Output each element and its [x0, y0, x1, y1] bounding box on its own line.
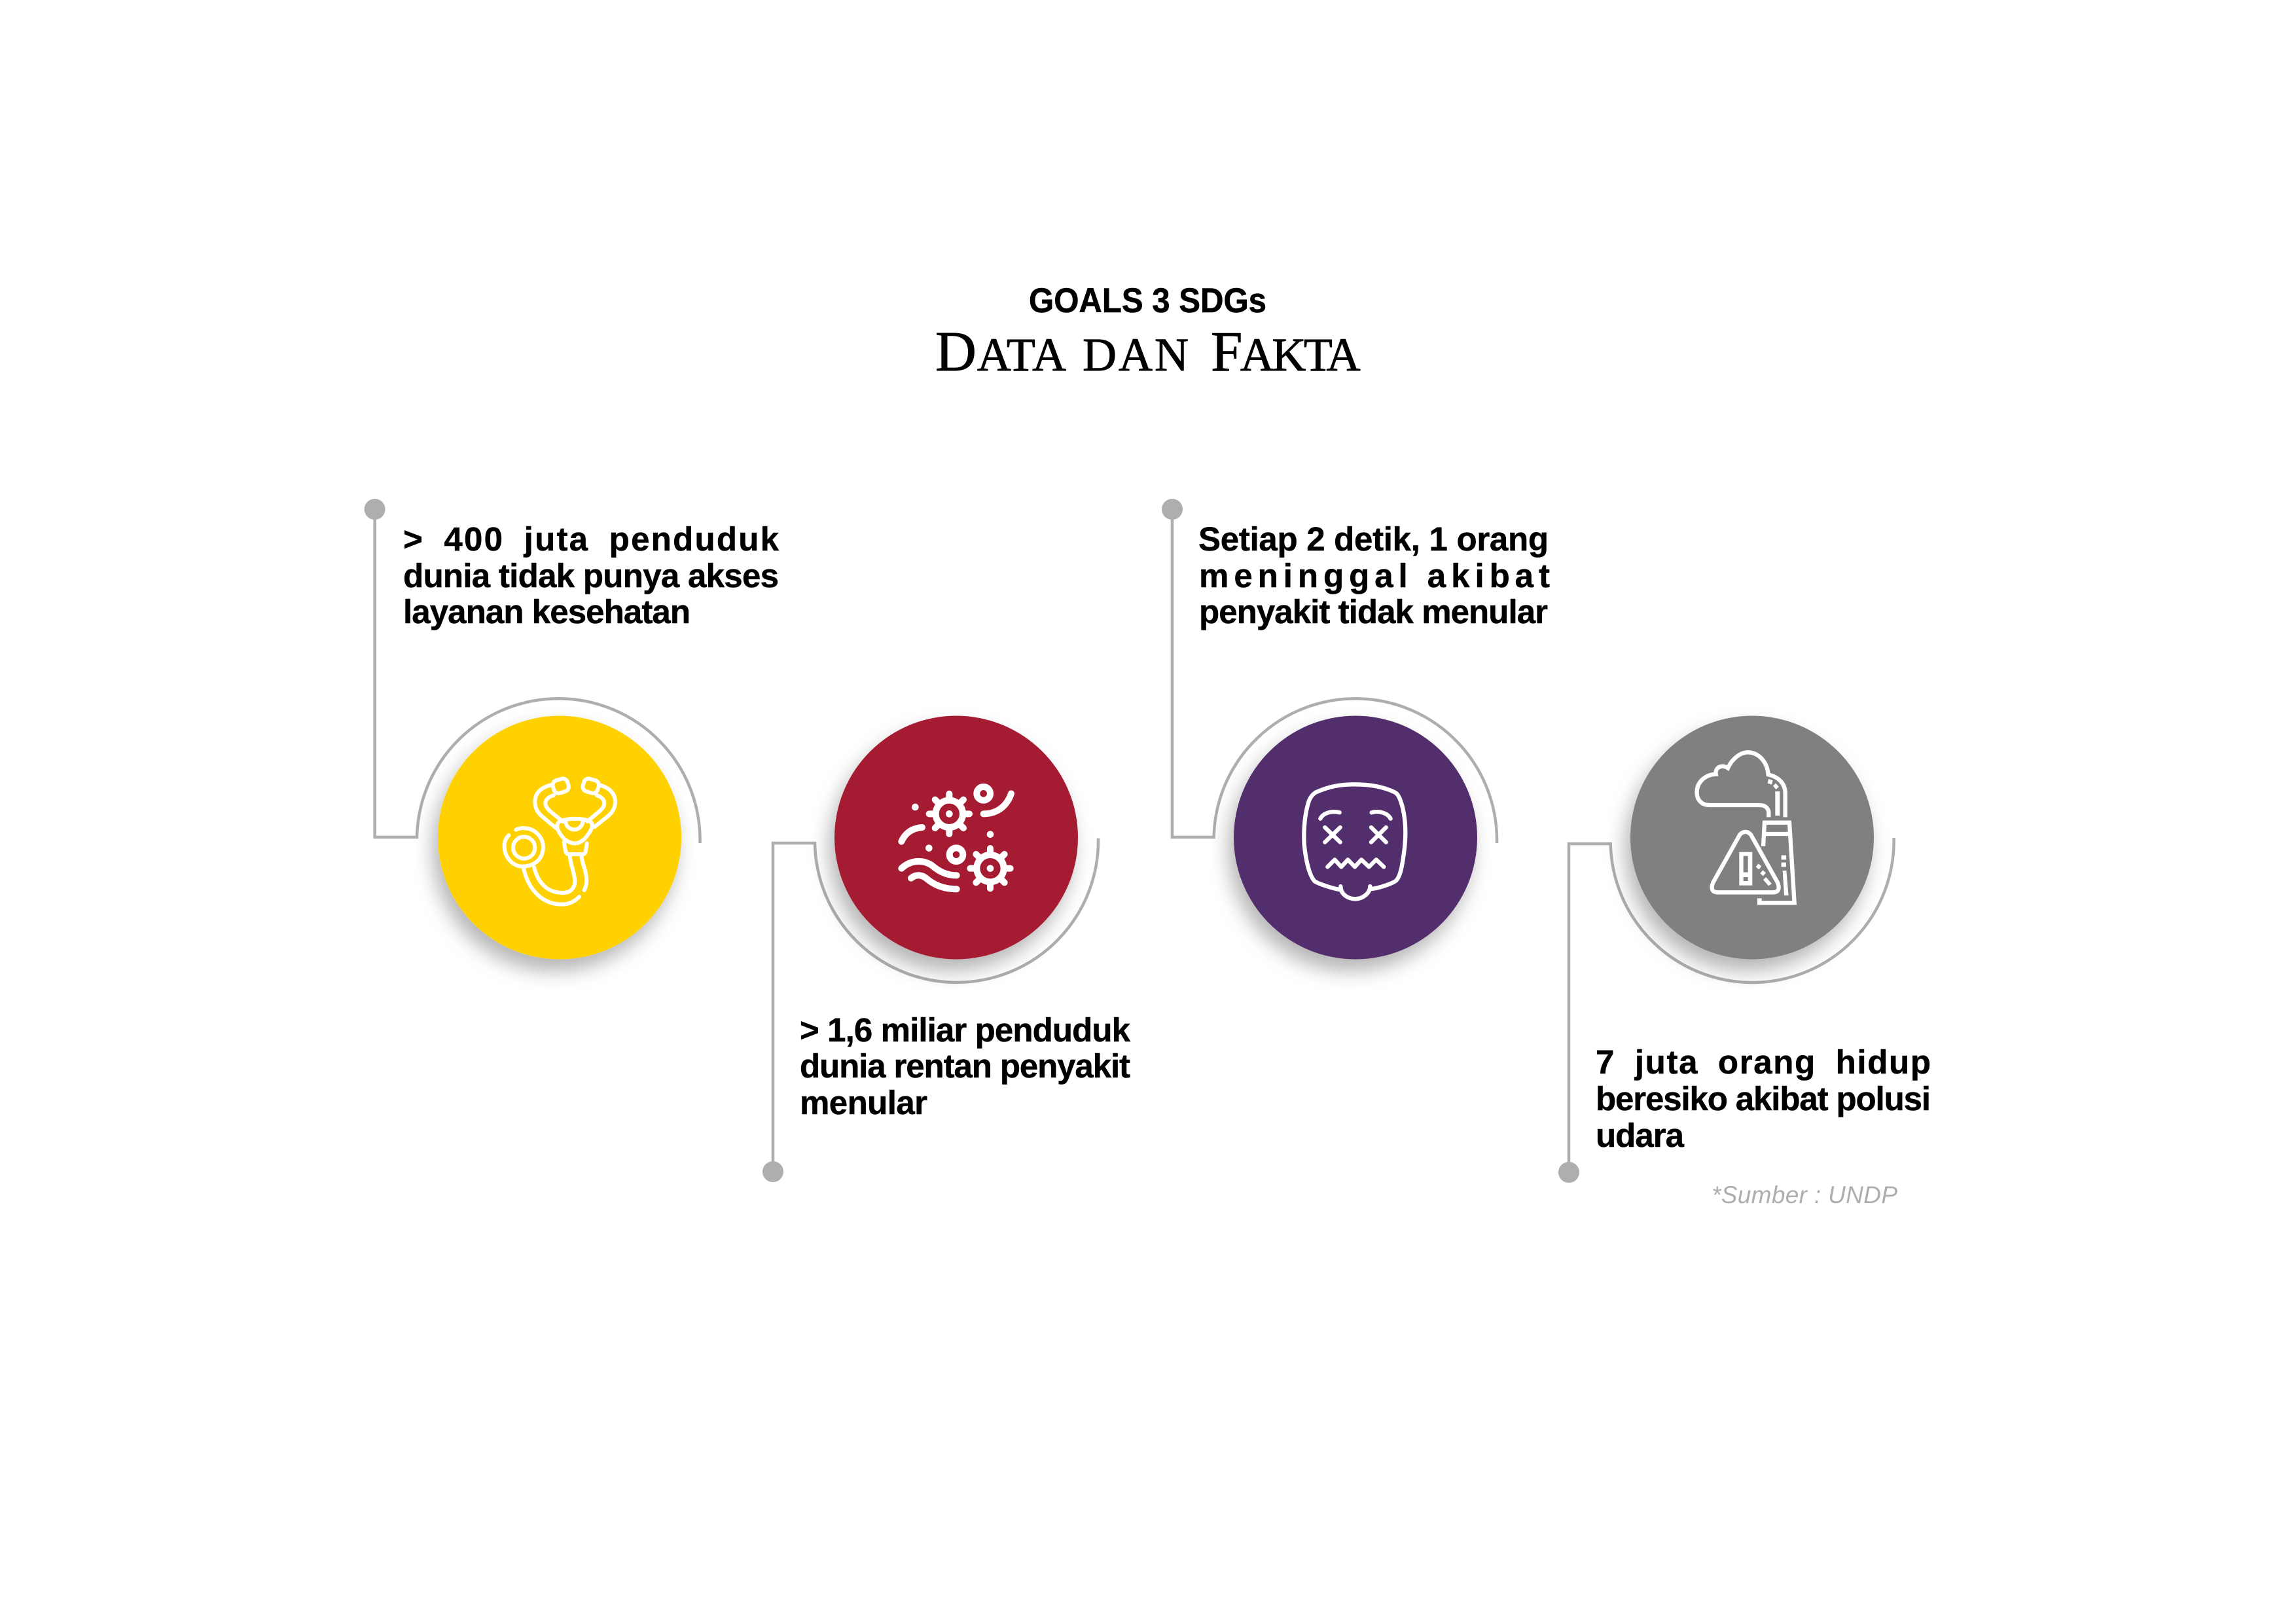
- text block: meninggal akibat: [1199, 557, 1550, 594]
- title: [935, 281, 1361, 383]
- connector line: [375, 509, 700, 843]
- panel: 1,6 miliar penduduk: [762, 716, 1131, 1182]
- icon: sick face: [1304, 784, 1405, 899]
- connector line: [773, 839, 1098, 1172]
- text block: > 400 juta penduduk: [403, 520, 780, 558]
- text block: 7 juta orang hidup: [1596, 1043, 1931, 1081]
- connector dot: [1162, 499, 1183, 520]
- heading: goals 3 SDGs: GOALS 3 SDGs: [1029, 281, 1266, 320]
- heading: data dan fakta: D: [935, 319, 977, 383]
- text block: dunia tidak punya akses: [403, 557, 779, 594]
- text block: > 1,6 miliar penduduk: [800, 1011, 1131, 1049]
- connector line: [1569, 838, 1894, 1172]
- heading: data dan fakta: AKTA: [1240, 329, 1361, 381]
- heading: data dan fakta: F: [1211, 319, 1241, 383]
- connector line: [1172, 509, 1497, 843]
- red circle: [834, 716, 1078, 960]
- heading: data dan fakta: ATA: [977, 329, 1077, 381]
- heading: data dan fakta: DAN: [1083, 329, 1204, 381]
- text block: dunia rentan penyakit: [800, 1047, 1130, 1085]
- purple circle: [1234, 716, 1477, 960]
- icon: factory pollution warning: [1697, 752, 1795, 905]
- text block: udara: [1596, 1117, 1685, 1154]
- panel: 400 juta penduduk: [365, 499, 780, 960]
- text block: layanan kesehatan: [403, 593, 691, 630]
- icon: stethoscope: [505, 778, 615, 905]
- text block: menular: [800, 1084, 927, 1121]
- panel: setiap 2 detik: [1162, 499, 1550, 960]
- yellow circle: [438, 716, 681, 960]
- text block: Setiap 2 detik, 1 orang: [1198, 520, 1549, 558]
- text block: penyakit tidak menular: [1199, 593, 1548, 630]
- text block: [800, 1011, 1131, 1121]
- panel: 7 juta orang: [1558, 716, 1931, 1208]
- text block: [1198, 520, 1550, 630]
- connector dot: [1558, 1162, 1579, 1183]
- text block: beresiko akibat polusi: [1596, 1080, 1931, 1117]
- connector dot: [365, 499, 386, 520]
- icon: germs: [901, 787, 1011, 889]
- text block: [1596, 1043, 1931, 1154]
- connector dot: [762, 1161, 783, 1182]
- text block: [403, 520, 780, 630]
- grey circle: [1630, 716, 1874, 960]
- source note: *Sumber : UNDP: [1712, 1182, 1897, 1208]
